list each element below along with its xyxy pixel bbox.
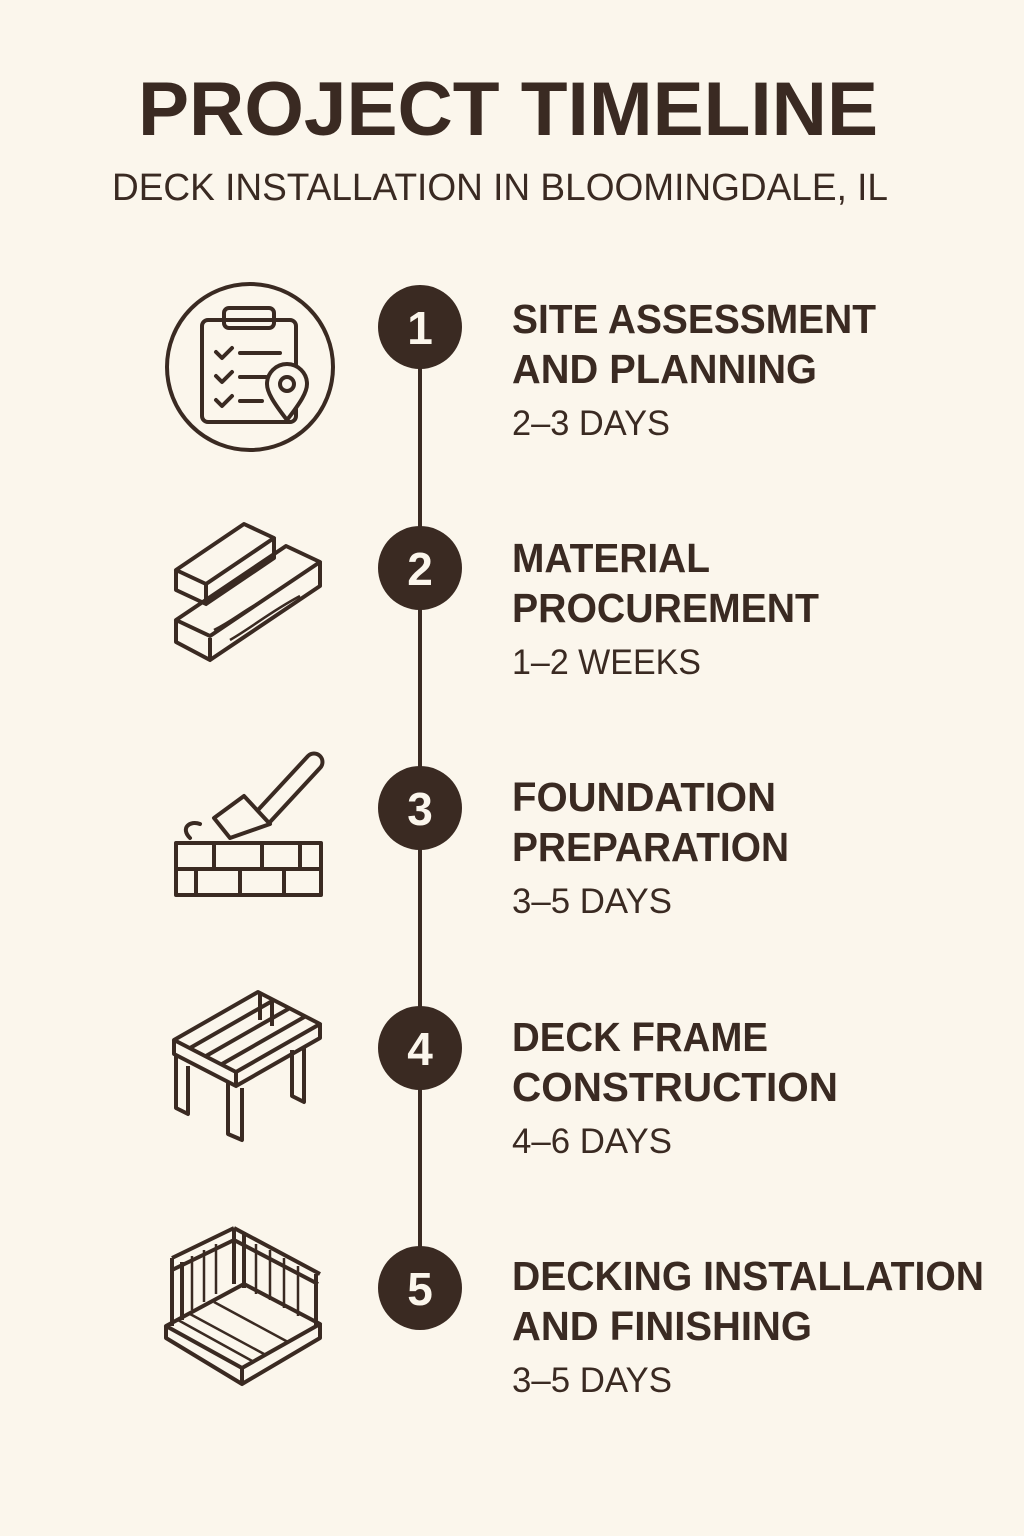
- step 2: 2: [407, 543, 433, 595]
- step 3: PREPARATION: [512, 824, 789, 870]
- icon: deck frame: [174, 992, 320, 1140]
- icon: finished deck with railing: [166, 1228, 320, 1384]
- subtitle: DECK INSTALLATION IN BLOOMINGDALE, IL: [112, 167, 888, 209]
- step 5: [378, 1246, 984, 1400]
- step 4: [378, 1006, 838, 1161]
- step 3: 3–5 DAYS: [512, 882, 672, 921]
- step 2: PROCUREMENT: [512, 585, 819, 631]
- step 3: [378, 766, 789, 921]
- step 4: DECK FRAME: [512, 1014, 768, 1060]
- step 1: SITE ASSESSMENT: [512, 296, 876, 342]
- step 4: 4–6 DAYS: [512, 1122, 672, 1161]
- step 2: [378, 526, 819, 682]
- step 1: AND PLANNING: [512, 346, 817, 392]
- step 3: FOUNDATION: [512, 774, 776, 820]
- step 5: 5: [407, 1263, 433, 1315]
- step 4: CONSTRUCTION: [512, 1064, 838, 1110]
- step 5: 3–5 DAYS: [512, 1361, 672, 1400]
- step 2: MATERIAL: [512, 535, 710, 581]
- timeline line: [418, 327, 422, 1288]
- title: PROJECT TIMELINE: [138, 67, 878, 152]
- step 3: 3: [407, 783, 433, 835]
- step 1: 2–3 DAYS: [512, 404, 670, 443]
- step 1: 1: [407, 302, 433, 354]
- icon: clipboard with location pin: [167, 284, 333, 450]
- step 5: DECKING INSTALLATION: [512, 1253, 984, 1299]
- step 1: [378, 285, 876, 443]
- step 2: 1–2 WEEKS: [512, 643, 701, 682]
- step 5: AND FINISHING: [512, 1303, 812, 1349]
- icon: lumber planks: [176, 524, 320, 660]
- step 4: 4: [407, 1023, 433, 1075]
- icon: trowel and bricks: [176, 754, 322, 895]
